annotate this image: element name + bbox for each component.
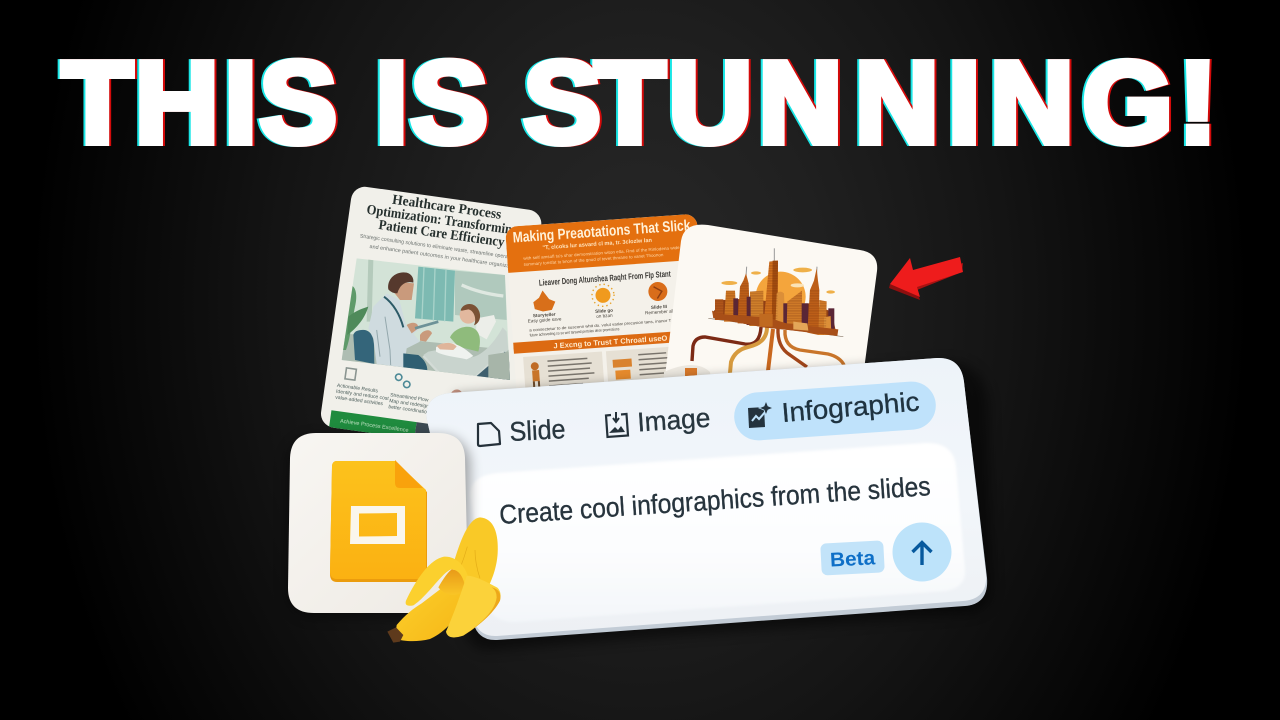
banana [387, 517, 501, 643]
footer icons and text: Map and redesign care [389, 398, 441, 411]
card: city skyline infographic [664, 225, 877, 385]
prompt field [470, 443, 965, 622]
tab: slide [478, 414, 566, 447]
tab: infographic (active) [733, 380, 937, 442]
paragraph [530, 319, 671, 336]
bottom sub-panels [523, 352, 604, 388]
road lines [692, 327, 844, 373]
card title: Healthcare Process [391, 193, 503, 223]
card: orange presentations infographic [506, 214, 698, 388]
footer icons and text: Streamlined Flow [390, 392, 429, 404]
input panel [426, 358, 992, 650]
footer icons and text: Identify and reduce cost [336, 389, 390, 402]
card: orange presentations infographic: Making Preaotations That Slick [512, 217, 691, 246]
icon captions [527, 303, 674, 324]
footer icons and text: better coordination [388, 404, 430, 416]
icon captions: on bzan [596, 313, 613, 319]
tab: image [606, 403, 711, 437]
paragraph: future acheveding so so wet tarsand pertolas dese proressions [529, 326, 620, 338]
card: orange presentations infographic: "T, clcoks lur asvard cl ma, tr. 3clozlw lan [542, 238, 653, 251]
app icon tile [286, 433, 470, 618]
small callout node [664, 365, 712, 385]
card title: Optimization: Transforming [366, 203, 519, 239]
beta badge: Beta [830, 547, 877, 572]
title: THIS IS STUNNING! [0, 38, 1217, 168]
card intro text: and enhance patient outcomes in your healthcare organization [369, 244, 519, 271]
card title [367, 194, 512, 249]
footer icons and text: Actionable Results [336, 383, 379, 395]
card: orange presentations infographic: with self amsofl ta's shar demonstration witon elta. Rnd of the Rinlodena wide of slal [523, 244, 693, 261]
prompt text: Create cool infographics from the slides [498, 471, 931, 530]
card intro text: Strategic consulting solutions to eliminate waste, streamline operations [359, 233, 519, 262]
google slides icon [330, 460, 427, 582]
icon captions: Storyteller [533, 312, 556, 318]
tab: slide: Slide [509, 414, 566, 447]
card: orange presentations infographic: summary tonsfat to bnon of the gnod of tevet thnrane to vanet Thoonon [523, 252, 664, 267]
tab: image: Image [636, 403, 711, 437]
skyline [708, 248, 843, 337]
red arrow [889, 257, 963, 300]
paragraph: a consectetur to de susconn whit do. volut varlar precusion tans, inanor T fed thoualisin ehas [529, 315, 709, 333]
silhouette mass is decorative backing [713, 298, 837, 335]
footer icons and text: value-added activities [335, 395, 384, 407]
footer green bar [329, 410, 417, 433]
section heading: Lieaver Dong Altunshea Raqht From Flp Stant [539, 269, 671, 288]
send button [892, 522, 952, 582]
card: healthcare infographic: Achieve Process Excellence [340, 419, 409, 434]
orange header [505, 213, 713, 273]
card: healthcare infographic [321, 186, 542, 433]
tab: infographic (active): Infographic [780, 387, 921, 428]
title: THIS IS STUNNING! [0, 38, 1215, 168]
hospital scene illustration [342, 258, 510, 380]
orange band [513, 332, 670, 354]
title: THIS IS STUNNING! [0, 38, 1219, 168]
icon captions: Easy guide save [528, 316, 562, 324]
beta badge [820, 540, 885, 576]
icon captions: Slide III [651, 304, 667, 310]
icon captions: Slide go [595, 308, 613, 314]
orange icons [532, 280, 668, 312]
card: orange presentations infographic: J Excng to Trust T Chroatl useO [553, 333, 668, 350]
icon captions: Remember all [645, 308, 674, 315]
card title: Patient Care Efficiency [378, 218, 505, 251]
footer icons and text [336, 367, 462, 414]
